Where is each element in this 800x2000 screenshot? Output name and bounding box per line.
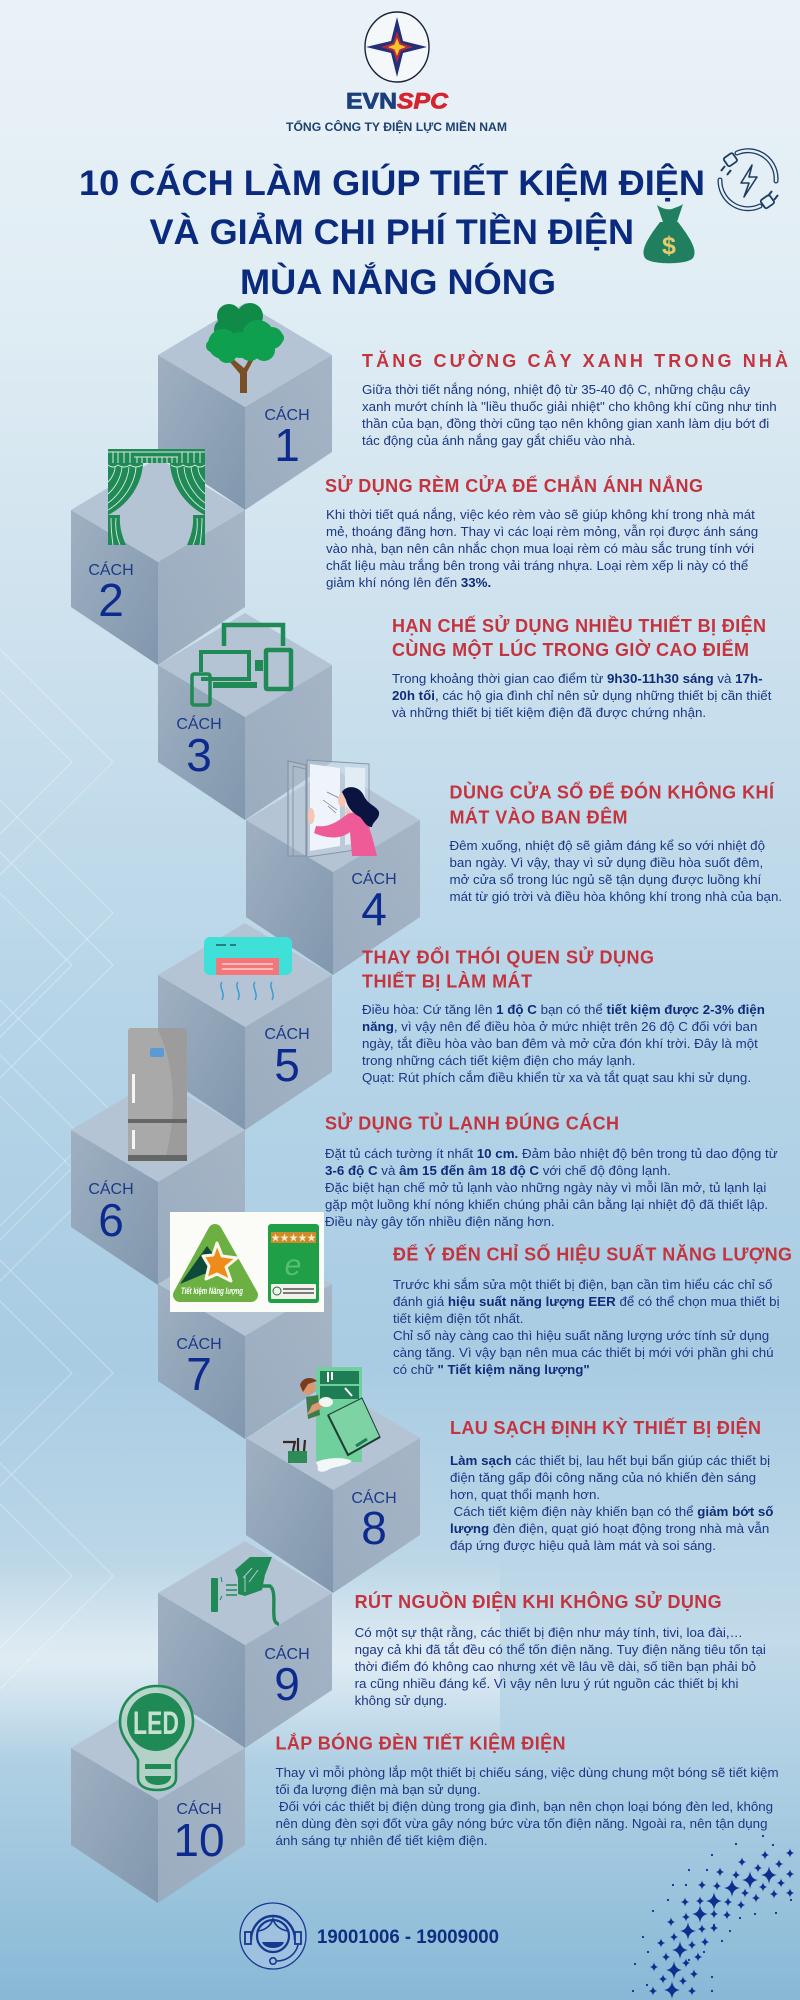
hotline number: 19001006 - 19009000 [317,1927,499,1948]
tip 10 text: Đối với các thiết bị điện dùng trong gia đình, bạn nên chọn loại bóng đèn led, không [279,1799,773,1814]
icon: hotline operator [240,1903,306,1969]
label: cách 9: CÁCH [264,1644,310,1663]
icon: energy labels [170,1212,324,1312]
tip 8 text: đáp ứng được hiệu quả làm mát và soi sáng. [450,1538,716,1553]
step 4: cube with window [246,760,420,975]
tip 9 text [355,1591,766,1708]
tip 1 text: TĂNG CƯỜNG CÂY XANH TRONG NHÀ [362,350,788,371]
icon: air conditioner [204,937,292,1000]
label: cách 1 [264,405,310,471]
label: cách 2: CÁCH [88,560,134,579]
tip 9 text: Có một sự thật rằng, các thiết bị điện như máy tính, tivi, loa đài,… [355,1625,743,1640]
tip 7 text: càng tăng. Vì vậy bạn nên mua các thiết bị mới với phần ghi chú [393,1345,774,1360]
tip 5 text: THIẾT BỊ LÀM MÁT [362,970,532,992]
tip 6 text: SỬ DỤNG TỦ LẠNH ĐÚNG CÁCH [325,1112,619,1134]
tip 4 text: MÁT VÀO BAN ĐÊM [450,806,628,828]
step 1: cube with tree [158,303,332,510]
tip 3 text [392,615,772,720]
tip 7 text: Trước khi sắm sửa một thiết bị điện, bạn cần tìm hiểu các chỉ số [393,1277,773,1292]
tip 6 text: Đặc biệt hạn chế mở tủ lạnh vào những ngày này vì mỗi lần mở, tủ lạnh lại [325,1180,766,1195]
tip 2 text: vào nhà, bạn nên cân nhắc chọn mua loại rèm có màu sắc trung tính với [326,541,754,556]
tip 8 text: LAU SẠCH ĐỊNH KỲ THIẾT BỊ ĐIỆN [450,1417,761,1438]
tip 8 text: Cách tiết kiệm điện này khiến bạn có thể giảm bớt số [454,1504,773,1519]
tip 1 text [362,350,788,448]
label: cách 10: 10 [173,1814,225,1866]
tip 5 text: ngày, tắt điều hòa vào ban đêm và mở cửa đón khí trời. Đây là một [362,1036,758,1051]
icon: tree [206,303,284,393]
tip 5 text: Quạt: Rút phích cắm điều khiển từ xa và tắt quạt sau khi sử dụng. [362,1070,751,1085]
tip 3 text: và những thiết bị tiết kiệm điện đã được chứng nhận. [392,705,706,720]
label: cách 6: CÁCH [88,1179,134,1198]
title: VÀ GIẢM CHI PHÍ TIỀN ĐIỆN [150,212,634,252]
tip 10 text: Thay vì mỗi phòng lắp một thiết bị chiếu sáng, việc dùng chung một bóng sẽ tiết kiệm [276,1765,779,1780]
tip 4 text: mát từ gió trời và điều hòa không khí trong nhà của bạn. [450,889,782,904]
tip 3 text: CÙNG MỘT LÚC TRONG GIỜ CAO ĐIỂM [392,639,749,660]
tip 7 text [393,1244,792,1377]
tip 9 text: thời điểm đó không cao nhưng xét về lâu về dài, số tiền bạn phải bỏ [355,1659,756,1674]
tip 1 text: tác động của ánh nắng gay gắt chiếu vào nhà. [362,433,635,448]
step 9: cube with unplug icon [158,1541,332,1748]
tip 1 text: thần của bạn, đồng thời cũng tạo nên không gian xanh làm dịu bớt đi [362,416,769,431]
label: cách 4: 4 [361,883,387,935]
tip 5 text: trong những cách tiết kiệm điện cho máy lạnh. [362,1053,635,1068]
tip 7 text: tiết kiệm điện tốt nhất. [393,1311,523,1326]
tip 2 text: chất liệu màu trắng bên trong vải tráng nhựa. Loại rèm xếp li này có thể [326,558,748,573]
tip 5 text: năng, vì vậy nên để điều hòa ở mức nhiệt trên 26 độ C đối với ban [362,1019,757,1034]
label: cách 5: CÁCH [264,1024,310,1043]
title: 10 CÁCH LÀM GIÚP TIẾT KIỆM ĐIỆN [79,163,705,203]
tip 5 text: Điều hòa: Cứ tăng lên 1 độ C bạn có thể tiết kiệm được 2-3% điện [362,1002,765,1017]
tip 1 text: Giữa thời tiết nắng nóng, nhiệt độ từ 35-40 độ C, những chậu cây [362,382,751,397]
icon: fridge [128,1028,187,1161]
decoration: stars [632,1835,794,1999]
label: cách 5: 5 [274,1039,300,1091]
tip 5 text [362,946,765,1085]
icon: hand unplugging [211,1557,279,1624]
tip 1 text: xanh mướt chính là "liều thuốc giải nhiệt" cho không khí cũng như tinh [362,399,777,414]
icon: curtain [108,449,205,545]
label: cách 9 [264,1644,310,1710]
tip 3 text: HẠN CHẾ SỬ DỤNG NHIỀU THIẾT BỊ ĐIỆN [392,615,766,636]
icon: money bag [643,204,695,263]
step 10: cube with LED bulb [71,1686,245,1903]
tip 9 text: không sử dụng. [355,1693,447,1708]
label: cách 8: 8 [361,1502,387,1554]
label: cách 6 [88,1179,134,1246]
icon: plug with lightning [720,151,778,209]
icon: LED bulb [120,1686,193,1790]
tip 6 text: Đặt tủ cách tường ít nhất 10 cm. Đảm bảo nhiệt độ bên trong tủ dao động từ [325,1146,778,1161]
tip 6 text: Điều này gây tốn nhiều điện năng hơn. [325,1214,555,1229]
tip 9 text: RÚT NGUỒN ĐIỆN KHI KHÔNG SỬ DỤNG [355,1591,722,1612]
tip 2 text: mẻ, thoáng đãng hơn. Thay vì các loại rèm mỏng, vẫn rọi được ánh sáng [326,524,758,539]
label: cách 5 [264,1024,310,1091]
label: cách 7: 7 [186,1348,212,1400]
step 8: cube with appliance cleaning [246,1367,420,1593]
icon: window and woman [288,760,379,857]
tip 3 text: Trong khoảng thời gian cao điểm từ 9h30-11h30 sáng và 17h- [392,671,763,686]
icon: LED bulb: LED [133,1705,179,1741]
icon: energy labels: e [285,1249,301,1282]
tip 10 text [276,1732,779,1848]
label: cách 10: CÁCH [176,1799,222,1818]
label: cách 9: 9 [274,1658,300,1710]
logo: EVNSPC: SPC [397,88,449,114]
logo: EVNSPC: TỔNG CÔNG TY ĐIỆN LỰC MIỀN NAM [286,119,507,134]
tip 4 text: ban ngày. Vì vậy, thay vì sử dụng điều hòa suốt đêm, [450,855,763,870]
label: cách 2 [88,560,134,626]
tip 5 text: THAY ĐỔI THÓI QUEN SỬ DỤNG [362,946,654,968]
label: cách 8: CÁCH [351,1488,397,1507]
tip 8 text: hơn, quạt thổi mạnh hơn. [450,1487,600,1502]
tip 9 text: ra cũng nhiều đáng kể. Vì vậy nên lưu ý rút nguồn các thiết bị khi [355,1676,738,1691]
icon: energy labels: Tiết kiệm Năng lượng [181,1286,243,1296]
icon: man cleaning fridge [283,1367,380,1472]
step 2: cube with curtain [71,449,245,665]
tip 2 text: giảm khí nóng lên đến 33%. [326,575,491,590]
label: cách 6: 6 [98,1194,124,1246]
label: cách 8 [351,1488,397,1554]
tip 9 text: ngay cả khi đã tắt đều có thể tốn điện năng. Tuy điện năng tiêu tốn tại [355,1642,766,1657]
tip 4 text: mở cửa sổ trong lúc ngủ sẽ tận dụng được luồng khí [450,872,761,887]
tip 7 text: ĐỂ Ý ĐẾN CHỈ SỐ HIỆU SUẤT NĂNG LƯỢNG [393,1244,792,1264]
step 3: cube with devices [158,613,332,820]
tip 8 text: Làm sạch các thiết bị, lau hết bụi bẩn giúp các thiết bị [450,1453,770,1468]
label: cách 1: 1 [274,419,300,471]
label: cách 4: CÁCH [351,869,397,888]
tip 8 text: điện tăng gấp đôi công năng của nó khiến đèn sáng [450,1470,756,1485]
tip 8 text [450,1417,773,1553]
tip 10 text: nên dùng đèn sợi đốt vừa gây nóng bức vừa tốn điện năng. Ngoài ra, nên tận dụng [276,1816,767,1831]
tip 7 text: đánh giá hiệu suất năng lượng EER để có thể chọn mua thiết bị [393,1294,780,1309]
step 7: cube with energy labels [158,1212,332,1439]
tip 4 text: DÙNG CỬA SỔ ĐỂ ĐÓN KHÔNG KHÍ [450,782,775,802]
label: cách 1: CÁCH [264,405,310,424]
tip 10 text: LẮP BÓNG ĐÈN TIẾT KIỆM ĐIỆN [276,1732,566,1754]
icon: devices [192,625,291,705]
label: cách 2: 2 [98,574,124,626]
tip 2 text [325,475,758,590]
tip 8 text: lượng đèn điện, quạt gió hoạt động trong nhà mà vẫn [450,1521,769,1536]
title: MÙA NẮNG NÓNG [240,262,556,302]
label: cách 7: CÁCH [176,1334,222,1353]
logo: EVNSPC: EVN [346,88,397,114]
step 6: cube with fridge [71,1028,245,1285]
tip 3 text: 20h tối, các hộ gia đình chỉ nên sử dụng những thiết bị cần thiết [392,688,772,703]
tip 7 text: có chữ " Tiết kiệm năng lượng" [393,1362,590,1377]
step 5: cube with air conditioner [158,923,332,1130]
tip 4 text: Đêm xuống, nhiệt độ sẽ giảm đáng kể so với nhiệt độ [450,838,765,853]
label: cách 3: 3 [186,729,212,781]
icon: energy labels: ★★★★★ [271,1233,316,1243]
tip 6 text: 3-6 độ C và âm 15 đến âm 18 độ C với chế độ đông lạnh. [325,1163,671,1178]
tip 6 text: gặp một luồng khí nóng khiến chúng phải cân bằng lại nhiệt độ đã thiết lập. [325,1197,768,1212]
label: cách 3 [176,714,222,781]
tip 4 text [450,782,782,904]
label: cách 7 [176,1334,222,1400]
tip 2 text: Khi thời tiết quá nắng, việc kéo rèm vào sẽ giúp không khí trong nhà mát [326,507,755,522]
tip 10 text: ánh sáng tự nhiên để tiết kiệm điện. [276,1833,487,1848]
label: cách 4 [351,869,397,935]
tip 7 text: Chỉ số này càng cao thì hiệu suất năng lượng ước tính sử dụng [393,1328,769,1343]
label: cách 3: CÁCH [176,714,222,733]
tip 6 text [325,1112,778,1229]
tip 2 text: SỬ DỤNG RÈM CỬA ĐỂ CHẮN ÁNH NẮNG [325,475,703,496]
title [79,163,705,302]
tip 10 text: tối đa lượng điện mà bạn sử dụng. [276,1782,481,1797]
icon: money bag: $ [662,232,676,260]
logo: EVNSPC [286,12,507,134]
